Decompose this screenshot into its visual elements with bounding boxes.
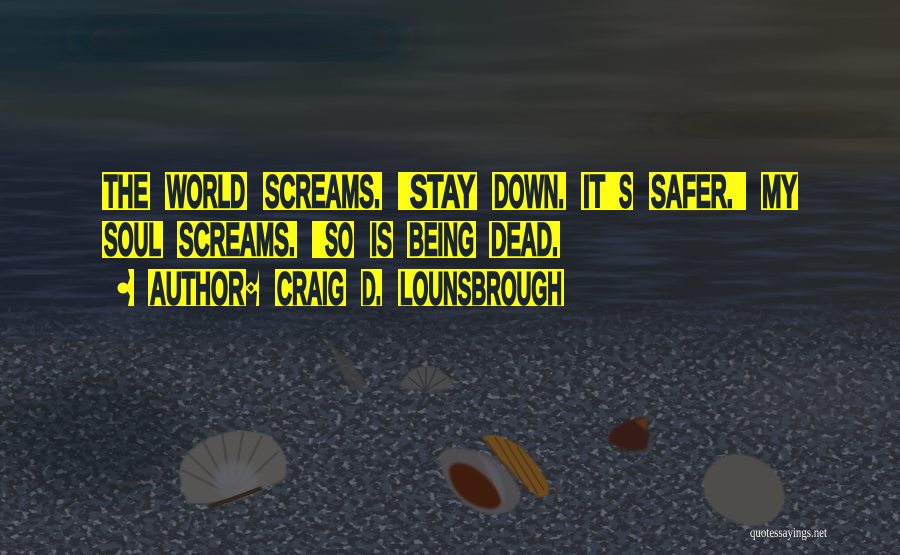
quote text: LOUNSBROUGH: [400, 263, 562, 314]
quote line 1: WORLD: [167, 166, 245, 217]
author line: D.: [362, 263, 381, 314]
watermark: quotessayings.net: [750, 526, 827, 541]
icon: colon ornament: [246, 269, 259, 306]
quote line 2: IS: [371, 214, 392, 265]
shell: orange conch: [439, 436, 549, 515]
sky: [0, 0, 900, 190]
author line: CRAIG: [277, 263, 344, 314]
quote line 1: MY: [762, 166, 797, 217]
quote line 1: SAFER.: [651, 166, 733, 217]
quote line 1: IT: [583, 166, 605, 217]
quote text: [102, 166, 798, 314]
icon: bullet: [118, 269, 134, 306]
quote line 1: [102, 166, 798, 217]
quote line 2: SOUL: [104, 214, 161, 265]
quote text: DEAD.: [491, 214, 558, 265]
rocky beach: [0, 295, 900, 555]
shell: large scallop: [180, 431, 287, 506]
quote line 1: DOWN.: [494, 166, 564, 217]
quote line 2: BEING: [409, 214, 474, 265]
shell: small scallop: [400, 366, 454, 391]
quote line 1: S: [619, 166, 632, 217]
quote line 2: [102, 214, 560, 265]
shell: shell fragment upper left: [330, 345, 368, 388]
quote line 2: SO: [325, 214, 353, 265]
sea: [0, 150, 900, 340]
author line: [118, 263, 564, 314]
coral fragment: [608, 417, 649, 451]
shell: pale scallop: [704, 454, 785, 526]
quote line 1: SCREAMS.: [265, 166, 380, 217]
quote line 2: SCREAMS.: [179, 214, 295, 265]
quote line 1: THE: [104, 166, 148, 217]
author line: AUTHOR: [150, 263, 244, 314]
quote line 1: STAY: [410, 166, 475, 217]
